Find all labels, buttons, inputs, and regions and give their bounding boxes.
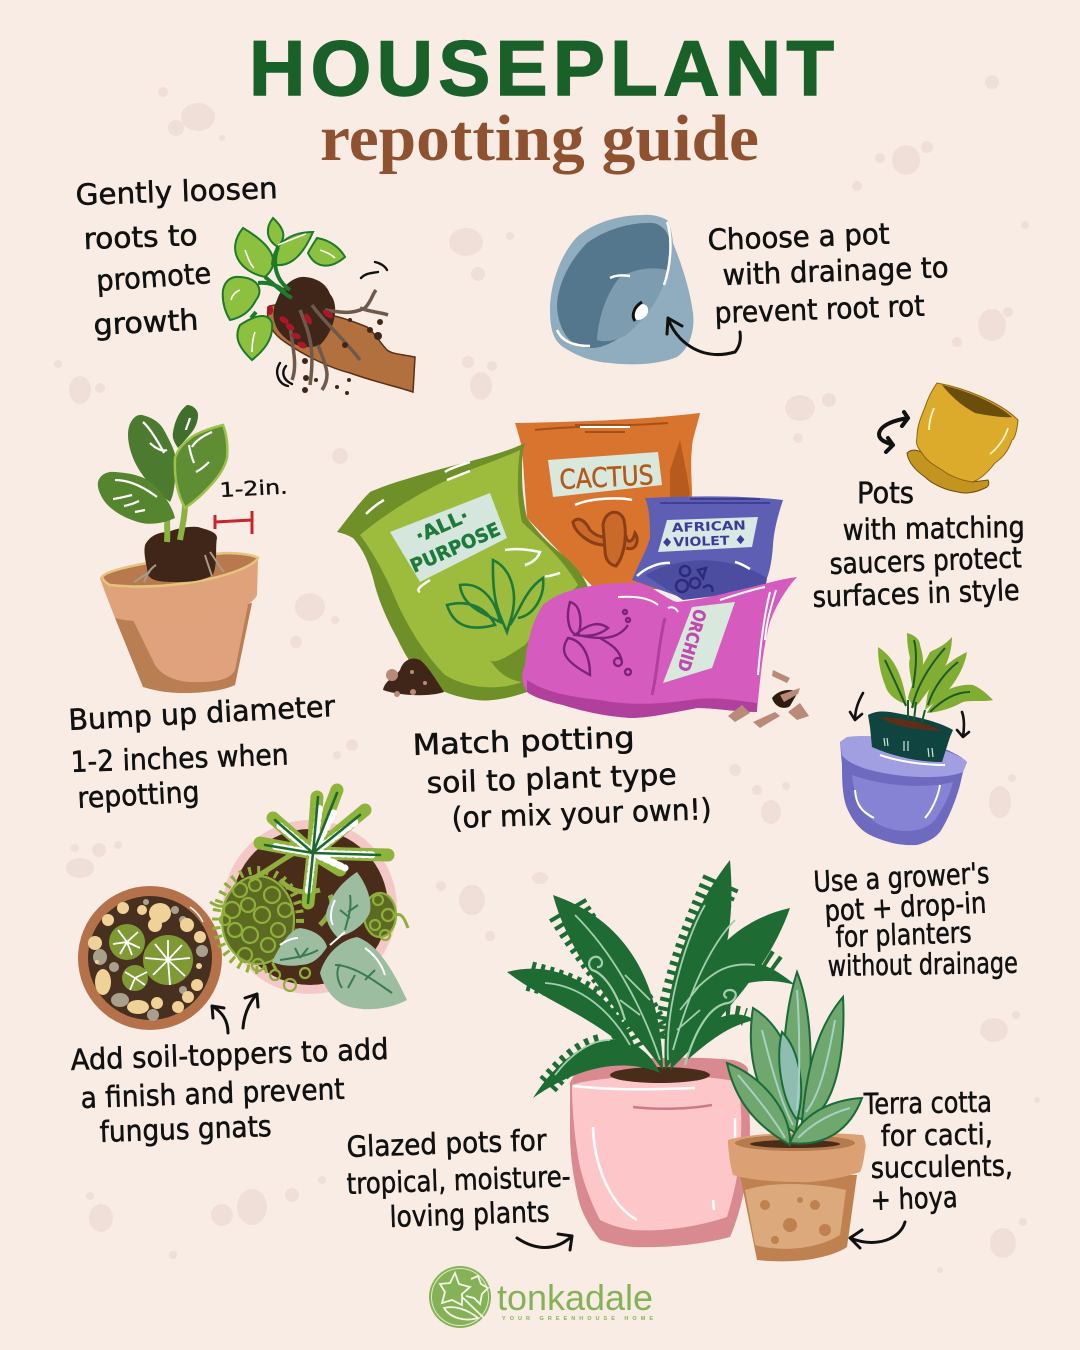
soil clump [273, 277, 335, 347]
bag: all purpose: PURPOSE [407, 518, 504, 578]
text: grower's pot: without drainage [828, 946, 1018, 983]
pot body [115, 603, 252, 693]
text: grower's pot: pot + drop-in [824, 886, 987, 928]
moss [210, 850, 408, 991]
illustration: cactus soil topper bowl [78, 886, 222, 1030]
bag: orchid: ORCHID [673, 607, 709, 674]
text: loosen roots: Gently loosen [75, 171, 278, 212]
text: saucers: saucers protect [829, 540, 1022, 581]
stems [167, 505, 185, 542]
text: grower's pot [813, 856, 1018, 983]
soil piles [383, 658, 809, 728]
text: loosen roots [75, 171, 278, 342]
text: match potting soil: (or mix your own!) [451, 792, 712, 835]
subtitle: repotting guide [320, 102, 759, 175]
illustration: yellow pot and saucer [907, 383, 1018, 493]
red nails [267, 305, 335, 350]
text: soil toppers: fungus gnats [99, 1109, 272, 1149]
text: saucers: surfaces in style [812, 573, 1020, 614]
text: soil toppers: a finish and prevent [80, 1072, 345, 1115]
soil ball with roots [144, 527, 217, 582]
illustration: plant in terra cotta pot [98, 405, 258, 693]
leaves [128, 415, 175, 502]
label: 1-2 in measurement: 1-2in. [219, 474, 288, 502]
text: grower's pot: for planters [835, 915, 972, 954]
text: saucers: Pots [857, 476, 914, 510]
title: HOUSEPLANT [249, 24, 834, 112]
fern sprig [260, 790, 388, 903]
text: bump up diameter: Bump up diameter [68, 689, 336, 737]
text: glazed pots: tropical, moisture- [346, 1159, 571, 1201]
illustration: aloe in terra cotta pot [727, 972, 866, 1261]
bag: african violet: ♦VIOLET ♦ [661, 532, 747, 550]
illustration: moss topper bowl [210, 790, 408, 1009]
bag: cactus: CACTUS [559, 460, 654, 496]
logo: tonkadale: tonkadale [497, 1277, 653, 1318]
text: soil toppers [70, 1032, 389, 1149]
text: terra cotta: + hoya [870, 1180, 958, 1217]
arrows: drop-in [850, 693, 969, 737]
aloe leaves [727, 972, 862, 1145]
fiddleheads [589, 957, 736, 1065]
frond veins [545, 905, 755, 1075]
logo: tonkadale [429, 1266, 653, 1328]
bag: african violet [632, 496, 783, 600]
pot rim back [570, 1058, 750, 1247]
pot rim [728, 1133, 866, 1182]
frond teeth [525, 880, 780, 1088]
logo: tonkadale: YOUR GREENHOUSE HOME [502, 1316, 653, 1322]
text: soil toppers: Add soil-toppers to add [70, 1032, 389, 1077]
planter [840, 737, 967, 845]
text: terra cotta: for cacti, [881, 1117, 993, 1153]
text: grower's pot: Use a grower's [813, 856, 990, 899]
text: terra cotta: succulents, [871, 1149, 1013, 1185]
text: choose a pot: prevent root rot [714, 289, 925, 330]
bag: cactus [515, 413, 700, 590]
illustration: loosening roots in hand [223, 218, 415, 395]
text: loosen roots: growth [93, 303, 199, 342]
text: choose a pot: with drainage to [722, 250, 949, 292]
nursery pot [868, 711, 953, 762]
text: glazed pots [346, 1123, 571, 1234]
pot body [740, 1175, 857, 1261]
motion marks [277, 262, 387, 386]
bag: all purpose [337, 443, 588, 701]
text: terra cotta: Terra cotta [863, 1085, 992, 1121]
text: glazed pots: loving plants [389, 1194, 550, 1234]
arrow: terra cotta [850, 1222, 905, 1248]
fronds [507, 860, 795, 1098]
text: match potting soil: Match potting [412, 720, 635, 762]
text: choose a pot [707, 217, 949, 330]
hand [268, 305, 415, 392]
pot rim [100, 552, 258, 622]
text: glazed pots: Glazed pots for [346, 1123, 547, 1164]
text: loosen roots: promote [95, 256, 212, 298]
text: saucers: with matching [843, 510, 1025, 547]
text: saucers [812, 476, 1025, 614]
arrow: pot drain [667, 318, 740, 354]
illustration: soil bags [337, 413, 809, 728]
bag: orchid [522, 577, 797, 718]
text: bump up diameter: 1-2 inches when [70, 737, 289, 779]
text: choose a pot: Choose a pot [707, 217, 890, 257]
bag: all purpose: ·ALL· [412, 505, 472, 548]
leaves [223, 218, 345, 360]
illustration: grower's pot in planter [840, 633, 993, 845]
arrow: glazed pots [517, 1234, 572, 1250]
text: match potting soil: soil to plant type [426, 757, 677, 800]
text: match potting soil [412, 720, 712, 835]
arrows: toppers [212, 994, 258, 1033]
soil specks [302, 318, 383, 395]
bag: african violet: AFRICAN [672, 517, 746, 535]
leaves [878, 633, 993, 713]
text: terra cotta [863, 1085, 1013, 1217]
illustration: blue pot with drainage hole [550, 215, 693, 364]
text: loosen roots: roots to [83, 218, 198, 256]
arrows: rotate pot [879, 412, 908, 452]
grey-green leaves [272, 872, 407, 1009]
text: bump up diameter: repotting [77, 775, 200, 815]
text: bump up diameter [68, 689, 336, 815]
illustration: fern in pink pot [507, 860, 795, 1247]
label: 1-2 in measurement [215, 474, 288, 534]
